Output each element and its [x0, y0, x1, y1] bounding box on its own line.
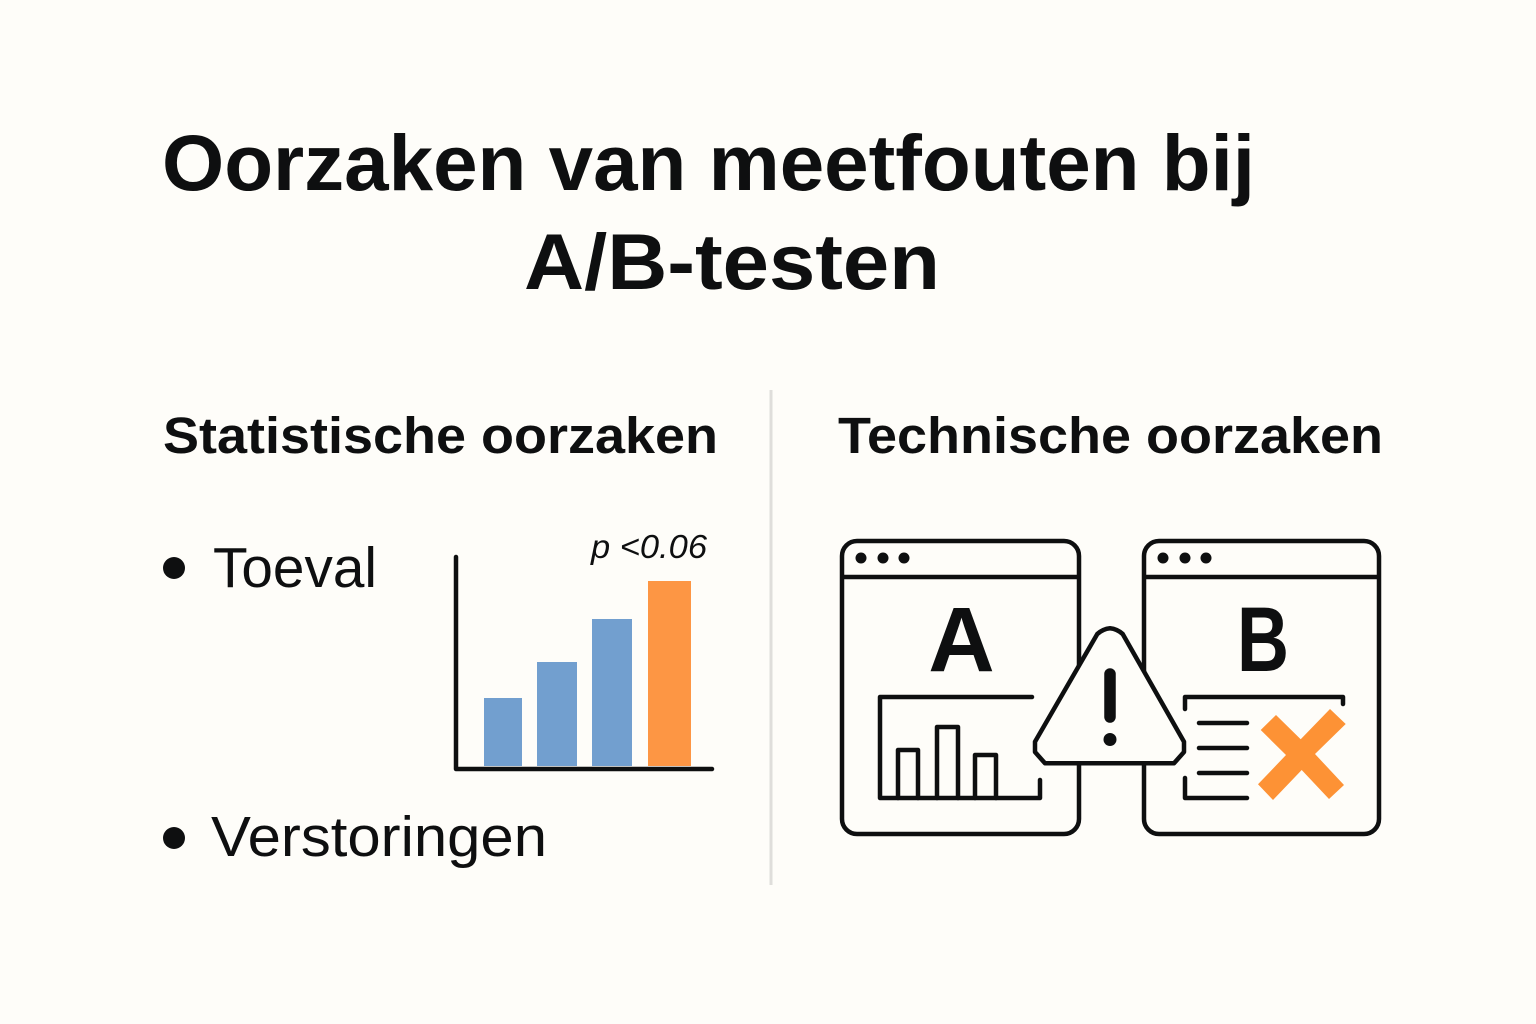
- title: A/B-testen: [524, 217, 940, 306]
- mini bar chart A: [880, 697, 1040, 798]
- icon: warning triangle: [1035, 628, 1184, 763]
- list item: Verstoringen: Verstoringen: [211, 805, 547, 869]
- bar 4 highlighted: [648, 581, 691, 766]
- heading: statistical causes: Statistische oorzaken: [163, 407, 718, 464]
- bar 1: [484, 698, 522, 766]
- heading: technical causes: Technische oorzaken: [838, 407, 1383, 464]
- panel: technical causes: [838, 407, 1383, 834]
- browser window B: [1144, 541, 1379, 834]
- panel: statistical causes: [163, 407, 718, 869]
- bar 2: [537, 662, 577, 766]
- bar 3: [592, 619, 632, 766]
- content frame with text lines: [1185, 697, 1343, 798]
- list item: Toeval: Toeval: [213, 536, 377, 600]
- p-value label: p <0.06: [590, 528, 708, 565]
- chart axes: [456, 557, 712, 769]
- icon: orange cross: [1258, 709, 1346, 800]
- browser window B: B: [1237, 589, 1289, 691]
- browser window A: A: [928, 589, 995, 691]
- bar chart: [456, 528, 712, 769]
- title: Oorzaken van meetfouten bij: [162, 118, 1255, 207]
- browser window A: [842, 541, 1079, 834]
- title: [162, 118, 1255, 306]
